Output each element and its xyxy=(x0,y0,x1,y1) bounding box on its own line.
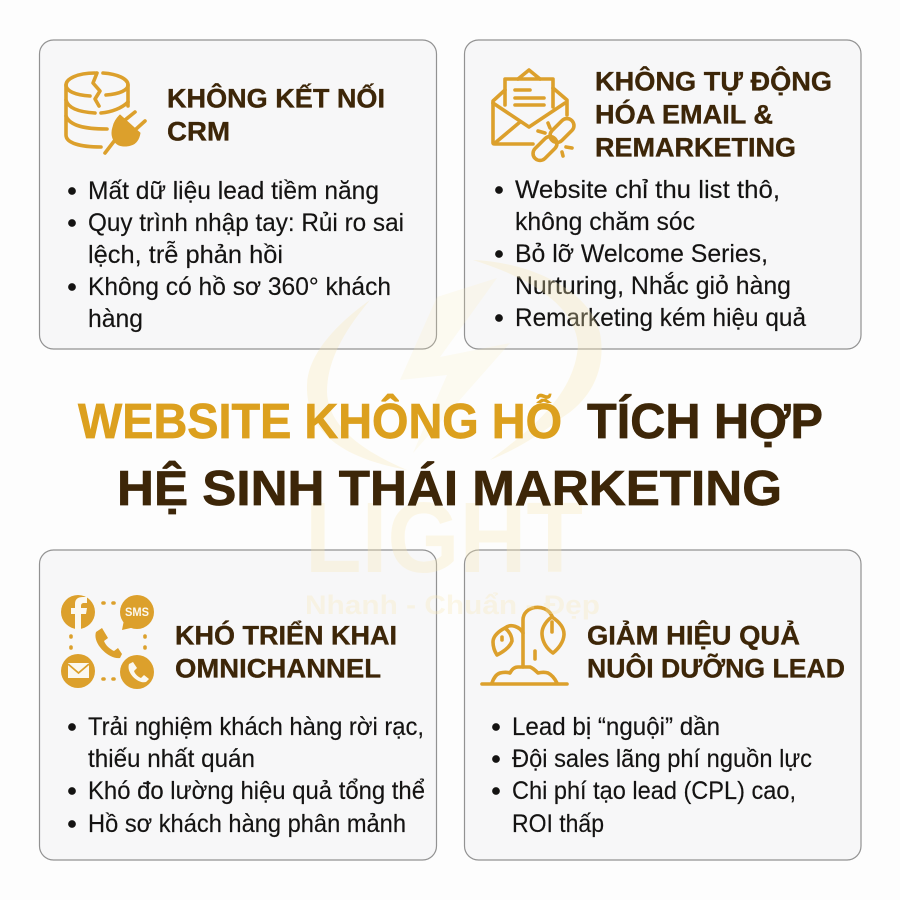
bullet list: thiếu nhất quán xyxy=(88,745,255,773)
bullet list: ROI thấp xyxy=(512,810,604,838)
icon: broken database with plug xyxy=(66,73,145,153)
bullet list xyxy=(495,176,806,332)
bullet list: Bỏ lỡ Welcome Series, xyxy=(515,240,768,268)
panel: omnichannel xyxy=(40,550,436,860)
bullet list: Remarketing kém hiệu quả xyxy=(515,304,806,332)
bullet list: Hồ sơ khách hàng phân mảnh xyxy=(88,810,406,838)
heading xyxy=(175,620,397,684)
watermark logo xyxy=(305,260,602,620)
heading: KHÔNG KẾT NỐI xyxy=(167,82,385,114)
bullet list: Trải nghiệm khách hàng rời rạc, xyxy=(88,713,424,741)
heading: OMNICHANNEL xyxy=(175,654,381,684)
heading: REMARKETING xyxy=(595,132,796,162)
bullet list: Nurturing, Nhắc giỏ hàng xyxy=(515,271,791,300)
bullet list xyxy=(68,177,404,333)
panel: no email automation xyxy=(464,40,861,349)
bullet list: Không có hồ sơ 360° khách xyxy=(88,273,391,301)
title: TÍCH HỢP xyxy=(587,395,823,449)
icon: omnichannel network: SMS xyxy=(125,605,149,619)
heading xyxy=(167,82,385,146)
bullet list: Chi phí tạo lead (CPL) cao, xyxy=(512,777,796,805)
icon: omnichannel network xyxy=(61,595,154,689)
heading: CRM xyxy=(167,116,230,146)
heading: GIẢM HIỆU QUẢ xyxy=(587,618,800,650)
watermark logo: LIGHT xyxy=(305,482,583,594)
bullet list xyxy=(492,713,812,838)
heading: KHÓ TRIỂN KHAI xyxy=(175,620,397,650)
bullet list xyxy=(68,713,425,838)
bullet list: Mất dữ liệu lead tiềm năng xyxy=(88,177,379,205)
heading xyxy=(587,618,845,684)
bullet list: Khó đo lường hiệu quả tổng thể xyxy=(88,777,425,805)
title: HỆ SINH THÁI MARKETING xyxy=(117,461,782,516)
bullet list: lệch, trễ phản hồi xyxy=(88,240,283,269)
panel: no CRM connection xyxy=(40,40,436,349)
bullet list: Đội sales lãng phí nguồn lực xyxy=(512,745,812,773)
bullet list: Lead bị “nguội” dần xyxy=(512,713,720,741)
bullet list: Quy trình nhập tay: Rủi ro sai xyxy=(88,209,404,237)
heading xyxy=(595,66,832,162)
panel: lead nurturing xyxy=(464,550,861,860)
icon: wilting plant xyxy=(482,607,567,684)
title: WEBSITE KHÔNG HỖ xyxy=(78,394,562,449)
title xyxy=(78,394,823,516)
bullet list: Website chỉ thu list thô, xyxy=(515,176,780,204)
heading: HÓA EMAIL & xyxy=(595,98,773,130)
icon: envelope with broken link xyxy=(493,70,577,163)
bullet list: không chăm sóc xyxy=(515,208,695,236)
heading: KHÔNG TỰ ĐỘNG xyxy=(595,66,832,96)
bullet list: hàng xyxy=(88,305,143,333)
heading: NUÔI DƯỠNG LEAD xyxy=(587,652,845,684)
watermark logo: Nhanh - Chuẩn - Đẹp xyxy=(305,590,600,620)
